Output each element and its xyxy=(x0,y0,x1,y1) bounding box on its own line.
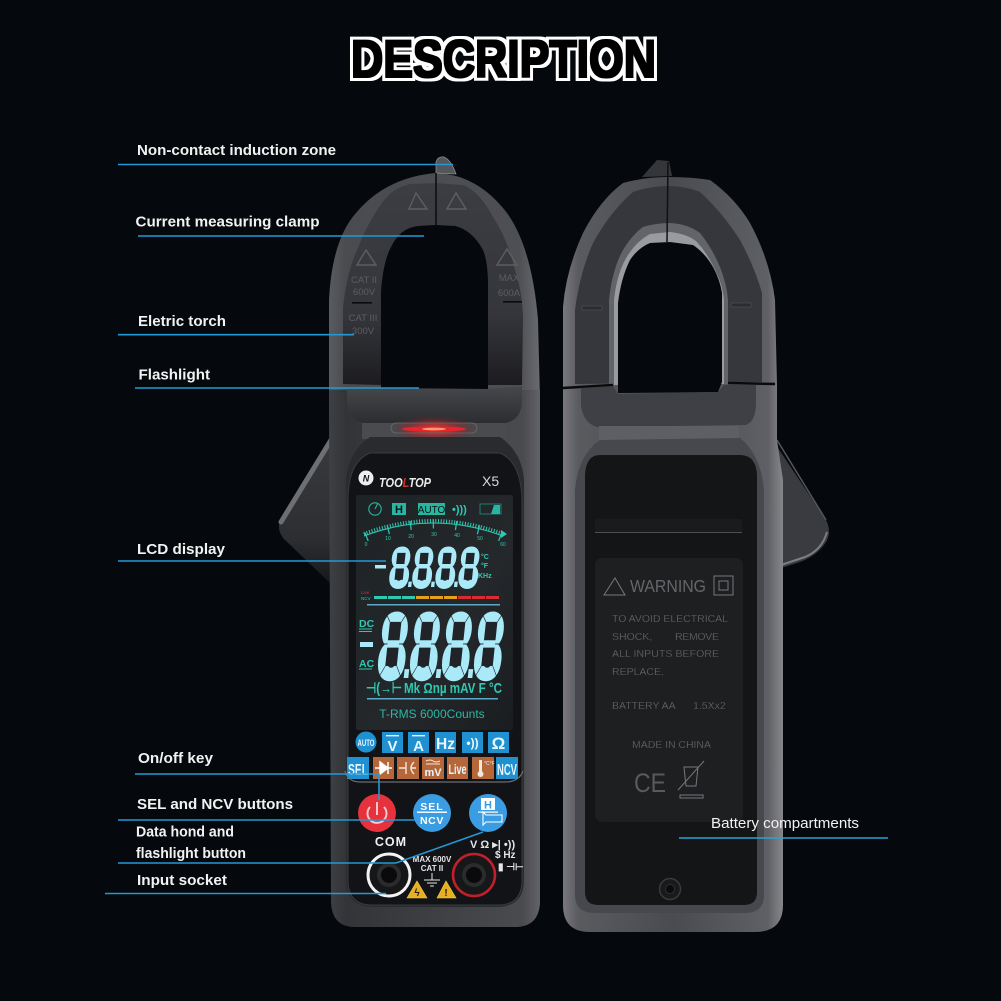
back hinge gap xyxy=(563,383,775,388)
label: battery compartments: Battery compartments xyxy=(711,816,859,832)
warning triangle xyxy=(604,578,625,595)
socket ratings: MAX 600V xyxy=(413,855,452,864)
label: current measuring clamp: Current measuring clamp xyxy=(136,214,320,230)
embossed clamp ratings: CAT II xyxy=(351,275,377,286)
leader line: input socket xyxy=(105,892,386,894)
compartment screw xyxy=(660,878,680,900)
upper readout units xyxy=(478,553,492,580)
AUTO indicator: AUTO xyxy=(418,505,446,516)
embossed clamp ratings: 300V xyxy=(352,326,375,337)
embossed clamp ratings xyxy=(349,273,522,337)
capacitor icon xyxy=(397,757,419,779)
analog scale xyxy=(364,521,507,548)
H indicator: H xyxy=(395,504,403,516)
panel: back of clamp meter xyxy=(563,160,829,932)
red flashlight glow xyxy=(391,416,477,442)
warning label xyxy=(595,558,743,822)
battery compartment xyxy=(585,455,757,905)
hold and flashlight button: H xyxy=(484,800,492,812)
clamp and body shell xyxy=(329,173,540,927)
bar graph: Live xyxy=(361,590,370,595)
analog scale: 60 xyxy=(500,542,506,548)
main LCD readout: ... xyxy=(400,625,480,692)
input symbols xyxy=(470,839,524,873)
embossed clamp ratings: CAT III xyxy=(349,313,377,324)
embossed clamp ratings: MAX xyxy=(499,273,520,284)
upper LCD readout: 8888 xyxy=(387,537,482,600)
CE mark: CE xyxy=(634,768,666,798)
input socket xyxy=(453,854,495,896)
input symbols: $ Hz xyxy=(495,850,516,861)
A icon: A xyxy=(413,738,424,755)
label: input socket: Input socket xyxy=(137,873,227,889)
leader line: SEL and NCV buttons xyxy=(118,819,415,821)
V icon: V xyxy=(387,738,398,755)
back clamp marks xyxy=(582,303,751,310)
face plate top band xyxy=(346,437,524,907)
bar graph xyxy=(361,590,500,606)
upper LCD readout: ... xyxy=(405,554,462,595)
upper readout units: KHz xyxy=(478,573,492,580)
unit symbols: Mk Ωnµ mAV F °C xyxy=(404,680,502,697)
millivolt icon xyxy=(422,757,444,779)
embossed clamp ratings: 600A xyxy=(498,288,521,299)
label: on/off key: On/off key xyxy=(138,751,213,767)
main LCD readout: 8888 xyxy=(374,595,509,698)
warning copy xyxy=(612,613,728,751)
clamp inner panel xyxy=(343,183,523,385)
leader line: current measuring clamp xyxy=(138,235,424,237)
A icon xyxy=(408,732,429,755)
COM label: COM xyxy=(375,835,407,849)
leader line: on/off key xyxy=(135,774,379,800)
Hz icon: Hz xyxy=(436,736,455,753)
COM socket xyxy=(368,854,410,896)
non-contact tip xyxy=(436,157,456,174)
diode icon xyxy=(373,757,394,779)
analog scale: 20 xyxy=(408,534,414,540)
Live icon xyxy=(447,757,468,779)
ohm icon: Ω xyxy=(492,734,505,753)
warning copy: 1.5Xx2 xyxy=(693,700,726,712)
Live icon: Live xyxy=(448,761,467,777)
model name: X5 xyxy=(482,473,499,489)
warning copy: REMOVE xyxy=(675,631,719,643)
warning heading: WARNING xyxy=(630,576,706,596)
leader line: flashlight xyxy=(135,387,419,389)
function icons row 2 xyxy=(347,757,518,779)
leader line: non-contact induction zone xyxy=(118,164,453,166)
neck strip xyxy=(362,423,507,439)
leader line: LCD display xyxy=(118,560,386,562)
ohm icon xyxy=(488,732,509,753)
bar graph: NCV xyxy=(361,596,371,601)
label: data hold and flashlight button: flashlight button xyxy=(136,846,246,862)
leader line: electric torch xyxy=(118,334,354,336)
back jaw split xyxy=(667,162,668,242)
warning triangle right xyxy=(437,881,456,899)
unit symbols xyxy=(366,680,502,697)
warning copy: TO AVOID ELECTRICAL xyxy=(612,613,728,625)
compartment surround xyxy=(575,438,764,913)
back tip xyxy=(642,160,672,177)
continuity icon xyxy=(462,732,483,753)
power button xyxy=(358,794,396,832)
divider under units xyxy=(367,698,498,700)
label: non-contact induction zone: Non-contact induction zone xyxy=(137,143,336,159)
clamp base xyxy=(347,386,522,423)
SEL NCV button xyxy=(413,794,451,832)
SEL NCV button: NCV xyxy=(420,815,444,827)
SEL icon xyxy=(347,757,369,779)
millivolt icon: mV xyxy=(424,767,442,779)
label: LCD display: LCD display xyxy=(137,542,225,558)
function icons row 1 xyxy=(356,732,509,755)
warning copy: SHOCK, xyxy=(612,631,652,643)
back clamp opening xyxy=(618,242,722,393)
label: data hold and flashlight button xyxy=(136,824,246,862)
socket ratings: CAT II xyxy=(421,864,443,873)
back base xyxy=(581,385,756,427)
upper readout units: °C xyxy=(481,553,489,561)
power timer icon xyxy=(369,503,381,515)
upper readout units: °F xyxy=(481,562,489,570)
left trigger fin xyxy=(279,432,345,585)
SEL icon: SEL xyxy=(348,762,368,779)
button well edge xyxy=(345,771,523,782)
H indicator xyxy=(392,503,406,516)
AUTO icon xyxy=(356,732,376,752)
warning copy: ALL INPUTS BEFORE xyxy=(612,648,719,660)
brand logo xyxy=(358,470,431,490)
back neck strip xyxy=(599,426,739,440)
panel: front of clamp meter xyxy=(279,157,540,927)
temperature icon: °C°F xyxy=(484,761,495,767)
label: flashlight: Flashlight xyxy=(138,368,210,384)
unit symbols: ⊣(→⊢ xyxy=(366,680,402,697)
recycling bin mark xyxy=(678,761,704,798)
socket ratings xyxy=(413,855,452,886)
analog scale: 10 xyxy=(385,536,391,542)
lower body shell xyxy=(329,390,540,927)
input symbols: ▮ ⊣⊢ xyxy=(498,862,524,873)
double insulation mark xyxy=(714,576,733,595)
back clamp panel xyxy=(575,186,762,384)
embossed clamp ratings: 600V xyxy=(353,287,376,298)
warning copy: BATTERY AA xyxy=(612,700,676,712)
slot xyxy=(595,519,742,533)
T-RMS caption: T-RMS 6000Counts xyxy=(379,707,485,721)
warning triangle right: ! xyxy=(444,888,448,899)
embossed warning triangles xyxy=(357,193,517,265)
analog scale: 0 xyxy=(365,542,368,548)
analog scale: 30 xyxy=(431,532,437,538)
input symbols: V Ω ▸| •)) xyxy=(470,839,515,851)
continuity icon: •)) xyxy=(466,736,479,750)
label: electric torch: Eletric torch xyxy=(138,314,226,330)
highlight around opening xyxy=(609,223,728,385)
warning triangle left xyxy=(407,881,427,899)
buzzer symbol: •))) xyxy=(452,504,467,516)
leader line: data hold and flashlight button xyxy=(118,832,483,863)
SEL NCV button: SEL xyxy=(420,801,444,813)
LCD display panel xyxy=(356,495,513,730)
title: DESCRIPTION xyxy=(351,30,656,89)
brand logo: TOOLTOP xyxy=(379,475,431,490)
brand logo: N xyxy=(363,474,370,484)
warning triangle left: ϟ xyxy=(414,888,420,899)
warning copy: REPLACE, xyxy=(612,666,664,678)
temperature icon xyxy=(472,757,495,779)
DC indicator: DC xyxy=(359,618,375,630)
warning copy: MADE IN CHINA xyxy=(632,739,711,751)
NCV icon xyxy=(496,757,518,779)
V icon xyxy=(382,732,403,755)
hold and flashlight button xyxy=(469,794,507,832)
NCV icon: NCV xyxy=(497,762,517,779)
analog scale: 50 xyxy=(477,536,483,542)
AUTO icon: AUTO xyxy=(358,738,374,748)
black face plate xyxy=(348,453,522,905)
AC indicator: AC xyxy=(359,658,375,670)
label: data hold and flashlight button: Data hond and xyxy=(136,824,234,840)
battery symbol xyxy=(480,504,501,514)
back shell xyxy=(563,177,783,932)
leader line: battery compartments xyxy=(679,837,888,839)
clamp opening xyxy=(381,225,488,389)
jaw split line xyxy=(435,173,437,225)
label: SEL and NCV buttons: SEL and NCV buttons xyxy=(137,797,293,813)
analog scale: 40 xyxy=(454,533,460,539)
right trigger fin xyxy=(770,436,829,570)
